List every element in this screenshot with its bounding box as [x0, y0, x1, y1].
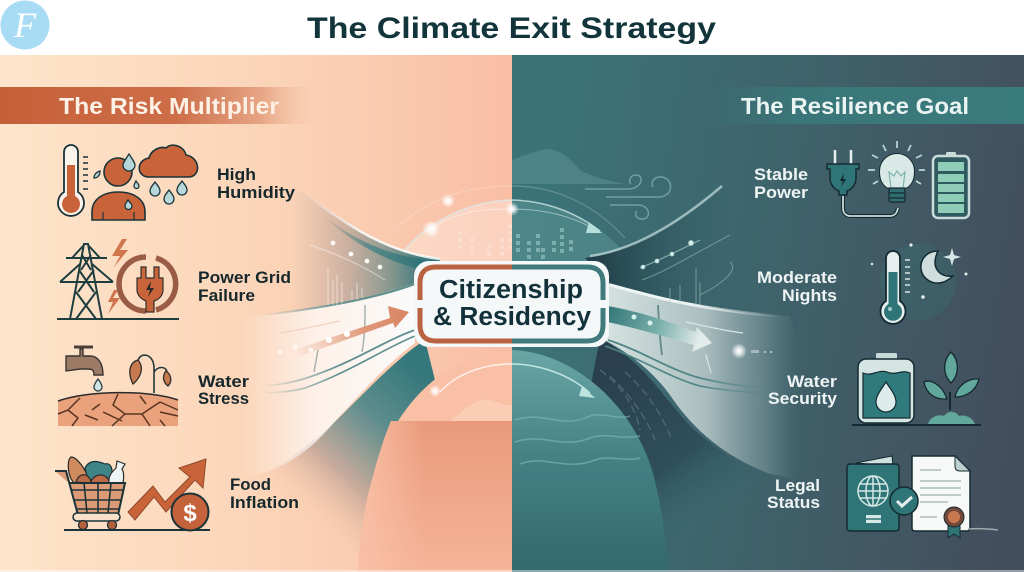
label: legal status: Status [767, 494, 820, 512]
label: food inflation: Food [230, 476, 271, 494]
central bridge illustration [150, 149, 800, 572]
icon: dripping tap, wilted plant and cracked soil [58, 347, 178, 426]
label: water security: Security [768, 390, 838, 408]
road lines left [262, 305, 415, 393]
lower band left [250, 340, 440, 572]
icon: grocery cart, rising arrow and dollar coin: $ [183, 500, 197, 527]
centre box: citizenship and residency: Citizenship [439, 276, 583, 304]
icon: thermometer and sweating person under a rain cloud [58, 145, 198, 220]
lower dome horizon [358, 421, 512, 572]
title: The Climate Exit Strategy [307, 12, 716, 45]
icon: water tank with drop and growing plant [852, 352, 981, 425]
icon: passport, approval check and certificate [847, 456, 998, 538]
label: high humidity: High [217, 166, 256, 184]
mountain and wind [512, 149, 671, 219]
road lines right [605, 305, 770, 394]
upper band highlight left [304, 193, 440, 259]
upper dome [397, 186, 625, 262]
label: food inflation: Inflation [230, 494, 299, 512]
label: water stress [198, 373, 250, 408]
label: power grid failure [198, 269, 291, 305]
item: stable power [754, 141, 969, 218]
banner: the resilience goal [700, 87, 1024, 124]
icon: pylon, bolts and broken plug ring [57, 239, 179, 319]
label: food inflation [230, 476, 299, 512]
upper band dark stripe left [322, 215, 440, 272]
label: stable power: Power [754, 184, 809, 202]
data bars in dome [458, 224, 573, 259]
label: moderate nights: Nights [782, 287, 837, 305]
label: water security [768, 373, 838, 408]
label: high humidity: Humidity [217, 184, 296, 202]
label: water stress: Stress [198, 390, 249, 408]
arrow: risk to centre [278, 306, 409, 358]
arrow: centre to resilience [608, 306, 772, 359]
banner: the risk multiplier: The Risk Multiplier [59, 93, 279, 119]
item: food inflation [55, 457, 299, 530]
item: water security [768, 352, 981, 425]
item: moderate nights [757, 243, 968, 324]
panel: risk background [0, 55, 512, 572]
banner: the resilience goal: The Resilience Goal [741, 93, 969, 119]
item: water stress [58, 347, 250, 426]
banner: the risk multiplier [0, 87, 320, 124]
label: water stress: Water [198, 373, 250, 391]
label: power grid failure: Failure [198, 287, 255, 305]
label: stable power: Stable [754, 166, 808, 184]
centre box: citizenship and residency: & Residency [433, 303, 592, 331]
bottom edge strip [0, 570, 1024, 572]
white road left [150, 283, 415, 478]
lower dome left [358, 350, 512, 572]
lower band right [590, 338, 770, 572]
upper band left [260, 190, 440, 316]
label: legal status: Legal [775, 477, 820, 495]
panel: resilience background [512, 55, 1024, 572]
lower dome details [429, 364, 672, 464]
upper band right [585, 180, 790, 315]
data lines right [640, 235, 733, 308]
road edge left [264, 284, 415, 315]
icon: thermometer, crescent moon and stars [871, 243, 968, 324]
white road right [600, 283, 800, 480]
label: legal status [767, 477, 820, 512]
item: power grid failure [57, 239, 291, 319]
upper band highlight right [590, 186, 722, 256]
logo: F [13, 5, 37, 45]
data lines left [310, 241, 385, 305]
label: high humidity [217, 166, 296, 202]
label: moderate nights [757, 269, 837, 305]
centre box: citizenship and residency [414, 261, 609, 347]
icon: grocery cart, rising arrow and dollar coin [55, 457, 210, 530]
icon: plug, light bulb and full battery [827, 141, 969, 218]
logo [0, 0, 50, 50]
item: legal status [767, 456, 998, 538]
label: stable power [754, 166, 809, 202]
lower dome horizon left fade [358, 421, 425, 572]
item: high humidity [58, 145, 296, 220]
lower dome right [512, 350, 668, 572]
label: moderate nights: Moderate [757, 269, 837, 287]
road edge right [610, 285, 780, 316]
label: water security: Water [787, 373, 838, 391]
label: power grid failure: Power Grid [198, 269, 291, 287]
